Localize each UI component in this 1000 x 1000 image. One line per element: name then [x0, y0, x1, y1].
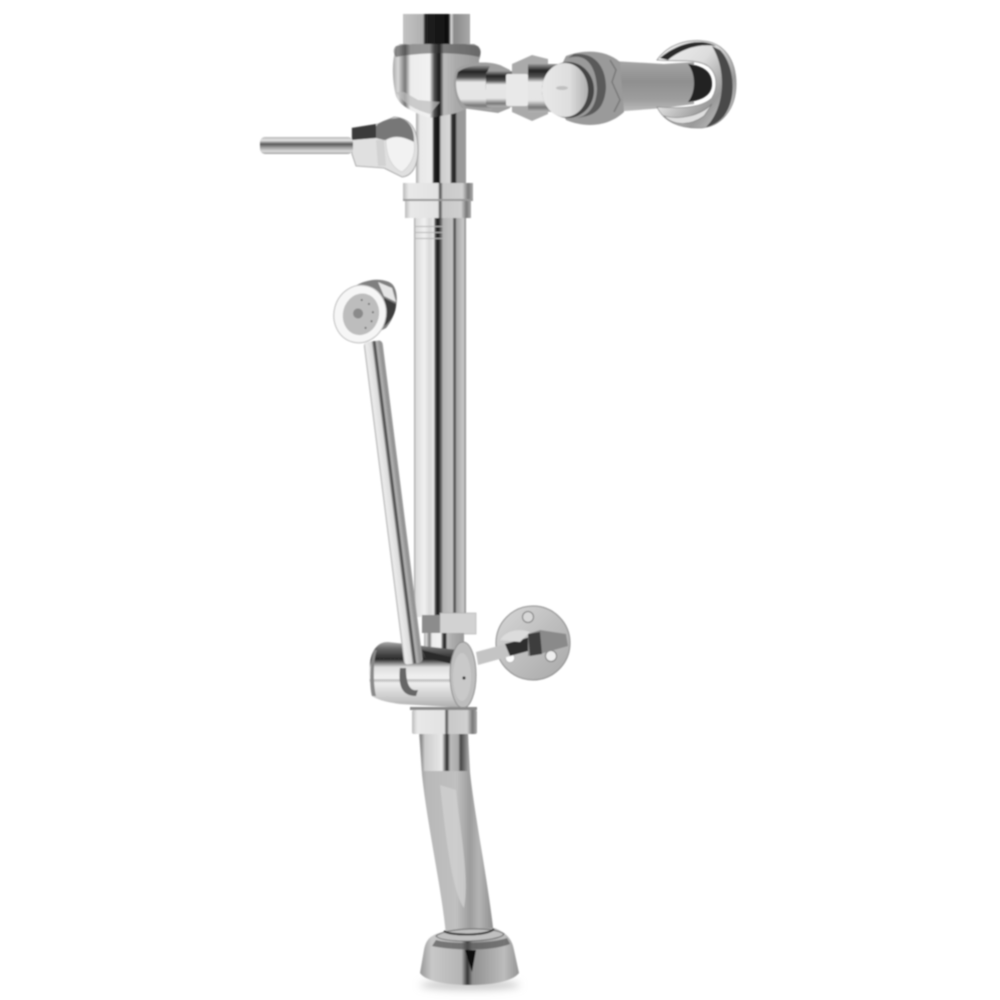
wall bracket flange: [496, 606, 570, 680]
handle housing: [352, 117, 418, 177]
hex nut on connector: [506, 55, 564, 121]
horizontal connector: [454, 63, 514, 113]
bottom valve block: [369, 642, 468, 708]
handle rod: [260, 137, 353, 154]
end disc with screw: [450, 642, 476, 708]
neck below valve body: [416, 106, 466, 186]
vacuum breaker bulge: [558, 52, 624, 125]
spray head body: [350, 280, 397, 336]
horizontal tube to wall: [612, 61, 712, 112]
lower hex nut: [410, 707, 477, 734]
lower tube collar: [422, 613, 476, 651]
main vertical tube: [414, 215, 466, 617]
vacuum breaker cap disc: [542, 62, 594, 118]
wall flange: [657, 41, 736, 128]
flush arm: [363, 340, 423, 665]
top cap: [403, 14, 470, 44]
wall bracket rod: [476, 630, 568, 665]
spray head face: [327, 279, 393, 349]
base shadow: [420, 980, 520, 990]
valve body: [393, 43, 481, 118]
lower elbow pipe: [419, 733, 494, 935]
floor base: [420, 928, 519, 985]
upper hex nut: [403, 183, 473, 218]
